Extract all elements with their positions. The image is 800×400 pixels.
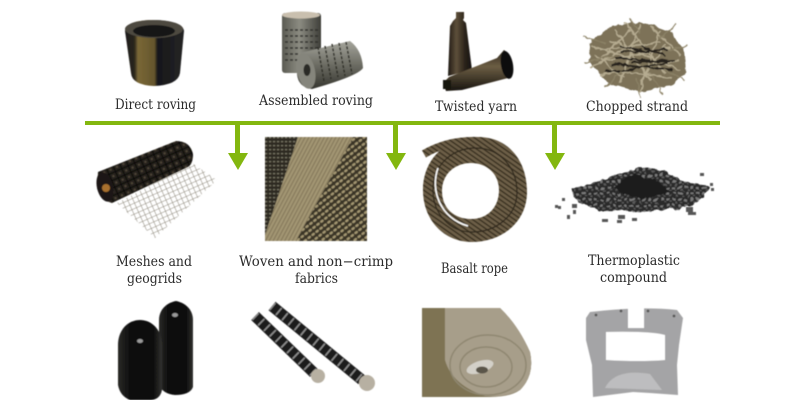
product: mesh roll [94,141,217,238]
product: woven fabric swatch [265,137,367,241]
product: car headliner [586,308,683,397]
label: assembled roving: Assembled roving [258,93,373,109]
label: meshes and geogrids: geogrids [127,271,182,287]
label: woven and non-crimp fabrics [239,254,393,287]
product: basalt rope [423,137,527,242]
product: black tanks [118,301,193,400]
label: woven and non-crimp fabrics: Woven and non−crimp [239,254,393,270]
divider line with arrows [85,121,720,170]
arrow 1 [228,125,248,170]
label: thermoplastic compound: compound [600,270,667,286]
product: spiral rebars [255,306,375,391]
label: direct roving: Direct roving [115,97,196,113]
product: chopped strand [584,18,688,97]
product: twisted yarn [443,12,515,91]
product: felt roll [422,308,531,397]
label: meshes and geogrids: Meshes and [116,254,192,270]
product: thermoplastic pellets [555,167,714,223]
label: meshes and geogrids [116,254,192,287]
label: thermoplastic compound: Thermoplastic [588,253,680,269]
label: thermoplastic compound [588,253,680,286]
product: direct roving [125,20,184,86]
arrow 2 [386,125,406,170]
label: basalt rope: Basalt rope [441,261,508,277]
label: chopped strand: Chopped strand [586,99,688,115]
label: twisted yarn: Twisted yarn [435,99,517,115]
arrow 3 [545,125,565,170]
label: woven and non-crimp fabrics: fabrics [295,271,338,287]
product: assembled roving [282,12,363,90]
